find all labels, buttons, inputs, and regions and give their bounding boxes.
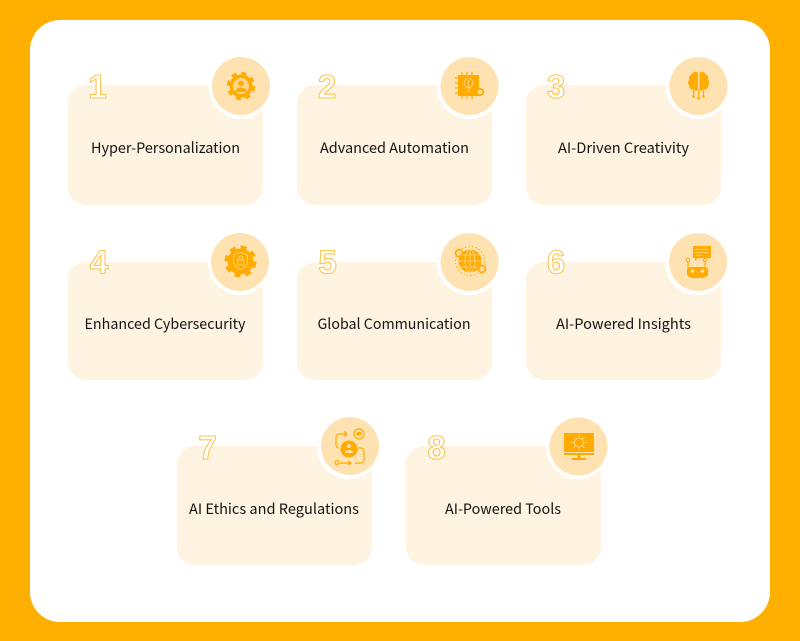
label: Global Communication (318, 313, 470, 334)
label: Enhanced Cybersecurity (84, 313, 246, 334)
number 8: 8 (427, 429, 446, 466)
number 6: 6 (547, 244, 565, 280)
card 2: Advanced Automation (297, 55, 501, 205)
icon: globe (456, 246, 486, 276)
number 4: 4 (90, 244, 109, 280)
label: AI-Driven Creativity (558, 137, 689, 158)
label: Hyper-Personalization (91, 137, 240, 158)
number 3: 3 (547, 68, 565, 105)
label: AI-Powered Insights (556, 313, 691, 334)
label: Advanced Automation (320, 137, 469, 158)
card 4: Enhanced Cybersecurity (68, 231, 272, 380)
number 7: 7 (198, 429, 217, 466)
icon: gear with person (228, 74, 254, 98)
icon: chip with lightbulb (455, 72, 483, 99)
label: AI-Powered Tools (445, 498, 561, 519)
number 5: 5 (318, 244, 337, 280)
icon: robot with speech bubble (686, 246, 711, 278)
number 1: 1 (88, 68, 107, 105)
card 1: Hyper-Personalization (68, 55, 272, 205)
card 7: AI Ethics and Regulations (177, 415, 381, 565)
icon: gear with shield (226, 248, 254, 276)
card 5: Global Communication (297, 231, 501, 380)
icon: brain (688, 72, 709, 100)
label: AI Ethics and Regulations (189, 498, 359, 519)
card 3: AI-Driven Creativity (526, 55, 730, 205)
card 6: AI-Powered Insights (526, 231, 729, 380)
number 2: 2 (318, 68, 336, 105)
icon: workflow with person (335, 429, 364, 465)
card 8: AI-Powered Tools (406, 415, 610, 565)
icon: monitor with gear (564, 433, 594, 460)
